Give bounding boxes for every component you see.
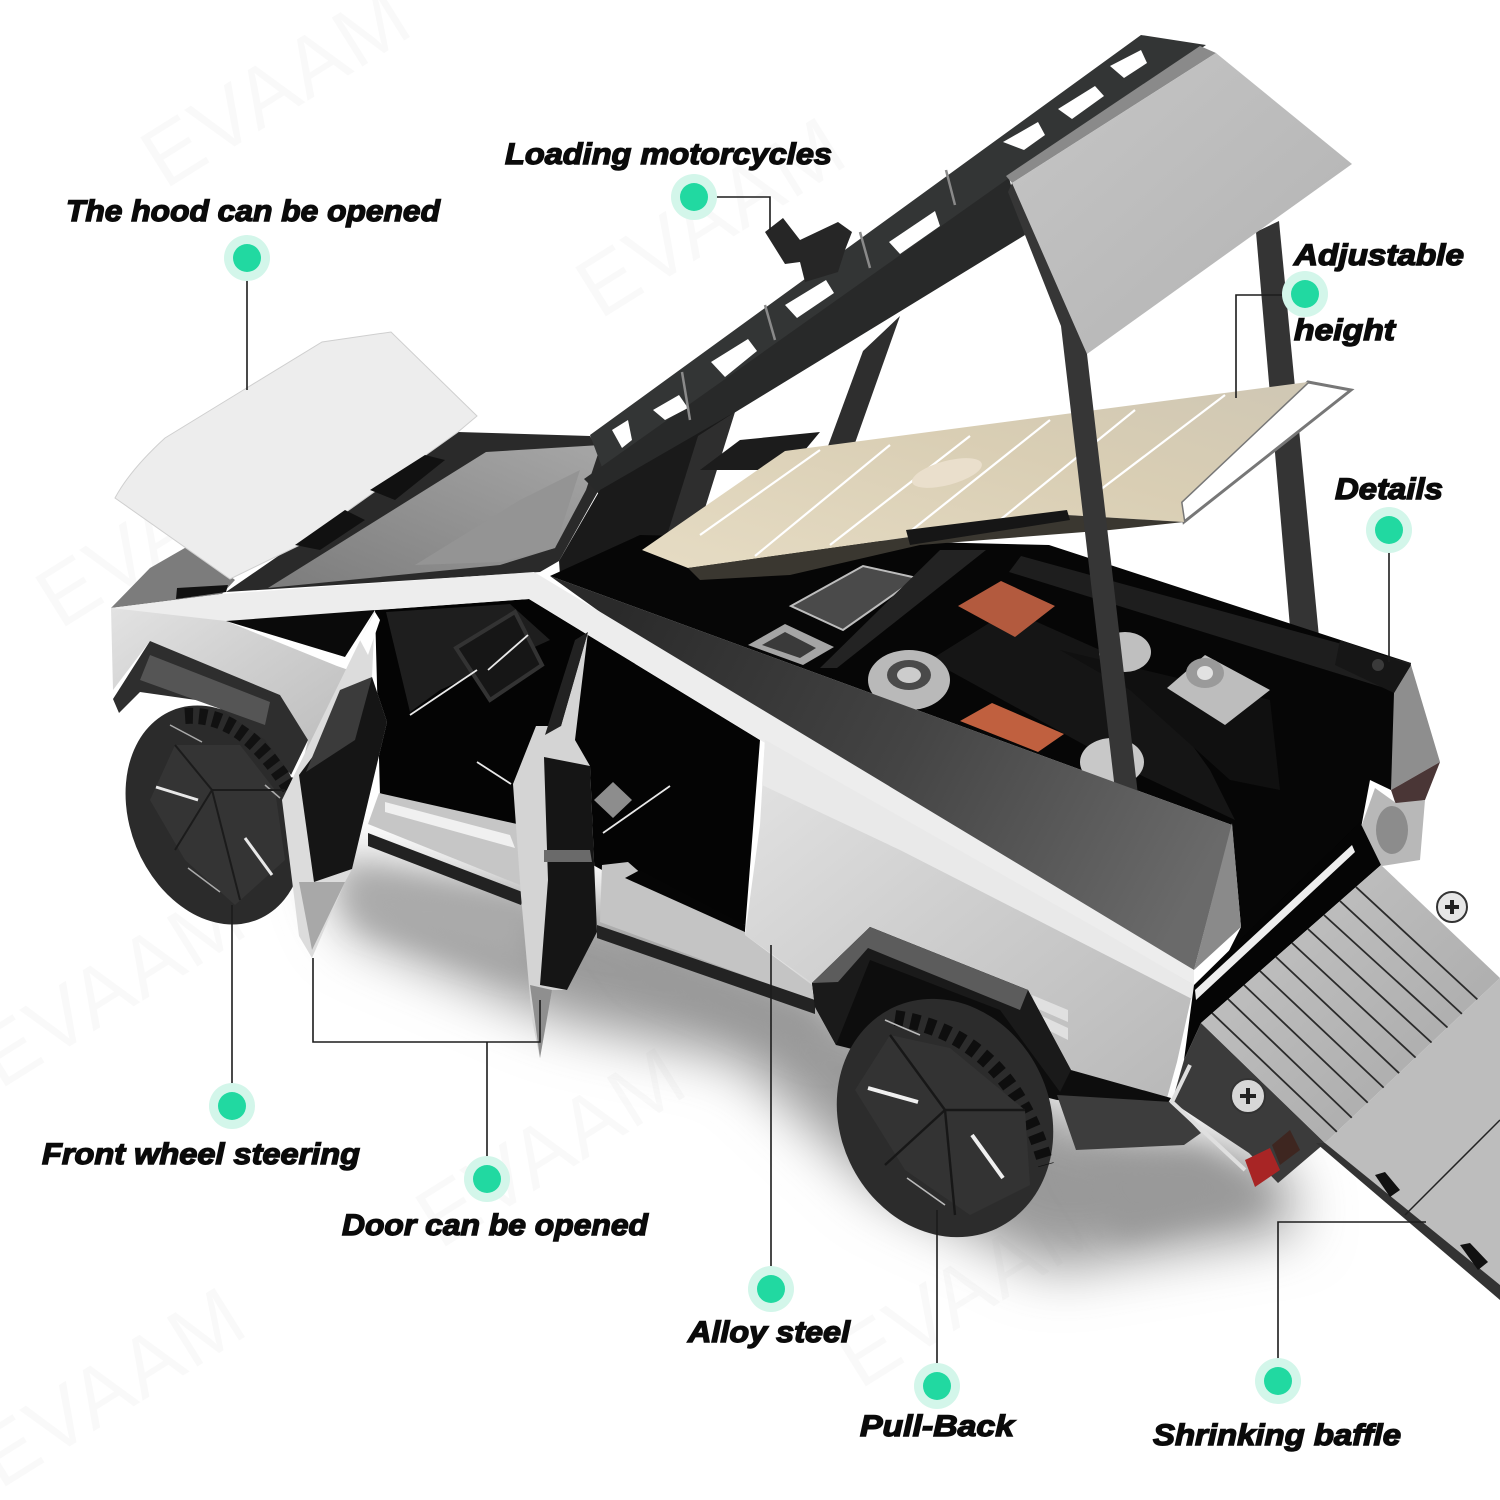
shelf (642, 382, 1351, 580)
roof strip (111, 572, 1194, 985)
chassis rear (1057, 1095, 1201, 1150)
front sill (368, 793, 528, 887)
rear sill (600, 862, 812, 1000)
cabin interior (368, 599, 815, 1014)
callout: adjustable height (1236, 239, 1464, 398)
rear arch cavity (812, 927, 1171, 1108)
front fender (111, 594, 372, 775)
lower strut (820, 550, 986, 668)
hook (765, 218, 852, 282)
front wheel (94, 678, 336, 952)
tilted panel (1012, 53, 1352, 354)
callout: hood (66, 195, 441, 390)
hood hinges (295, 455, 445, 550)
callout: pull-back (860, 1210, 1015, 1443)
ramp hinge (1184, 822, 1381, 1060)
front rack leg (1008, 183, 1138, 795)
rear wheel (798, 963, 1092, 1273)
rear wheel arch (812, 927, 1071, 1092)
rear corner and tail (1335, 640, 1440, 866)
callout: pull-back: Pull-Back (860, 1410, 1015, 1443)
hood underside and nose (111, 545, 235, 608)
watermarks: EVAAM (20, 408, 322, 645)
front wheel arch (113, 641, 308, 775)
rack struts (648, 316, 900, 601)
bed rim (1009, 556, 1411, 690)
windshield (268, 445, 601, 588)
front body (111, 572, 1194, 1108)
dark wedge under beam (559, 412, 735, 590)
front door (282, 610, 387, 958)
screw (1437, 892, 1467, 922)
callout: adjustable height: height (1294, 314, 1397, 347)
rear door (513, 632, 597, 1058)
ground shadow (320, 860, 1300, 1270)
callout: door can be opened (313, 958, 649, 1242)
watermarks: EVAAM (820, 1168, 1122, 1405)
nose vent (176, 585, 228, 599)
orange pads (958, 581, 1055, 637)
ribbed section (1201, 865, 1500, 1143)
callout: front wheel steering (42, 905, 360, 1171)
callout: details (1335, 473, 1443, 662)
loading ramp (1172, 822, 1500, 1300)
rear body panel (745, 740, 1194, 1098)
callout: door can be opened: Door can be opened (342, 1209, 649, 1242)
rack frame (584, 35, 1216, 495)
metal caps (868, 650, 950, 710)
rear rack leg (1256, 221, 1319, 637)
cowl (226, 432, 610, 592)
side dark panel (550, 576, 1232, 970)
callout: shrinking baffle: Shrinking baffle (1153, 1419, 1401, 1452)
quarter window (226, 610, 375, 657)
red latch (1245, 1148, 1280, 1187)
callout: loading motorcycles: Loading motorcycles (505, 138, 832, 171)
watermarks: EVAAM (400, 1028, 702, 1265)
storage trays (791, 566, 917, 630)
callout: front wheel steering: Front wheel steering (42, 1138, 360, 1171)
hood (115, 332, 477, 579)
callout: loading motorcycles (505, 138, 832, 230)
callout: shrinking baffle (1153, 1222, 1426, 1452)
screw (1231, 1079, 1265, 1113)
callout: alloy steel (687, 945, 851, 1349)
lower plate (1325, 978, 1500, 1285)
callout: details: Details (1335, 473, 1443, 506)
callout: adjustable height: Adjustable (1293, 239, 1464, 272)
callout: hood: The hood can be opened (66, 195, 441, 228)
watermarks: EVAAM (560, 98, 862, 335)
callout: alloy steel: Alloy steel (687, 1316, 851, 1349)
cybertruck model (94, 35, 1500, 1300)
parts behind shelf (700, 432, 820, 470)
cargo bed (550, 535, 1411, 1020)
watermarks (0, 0, 1122, 1500)
